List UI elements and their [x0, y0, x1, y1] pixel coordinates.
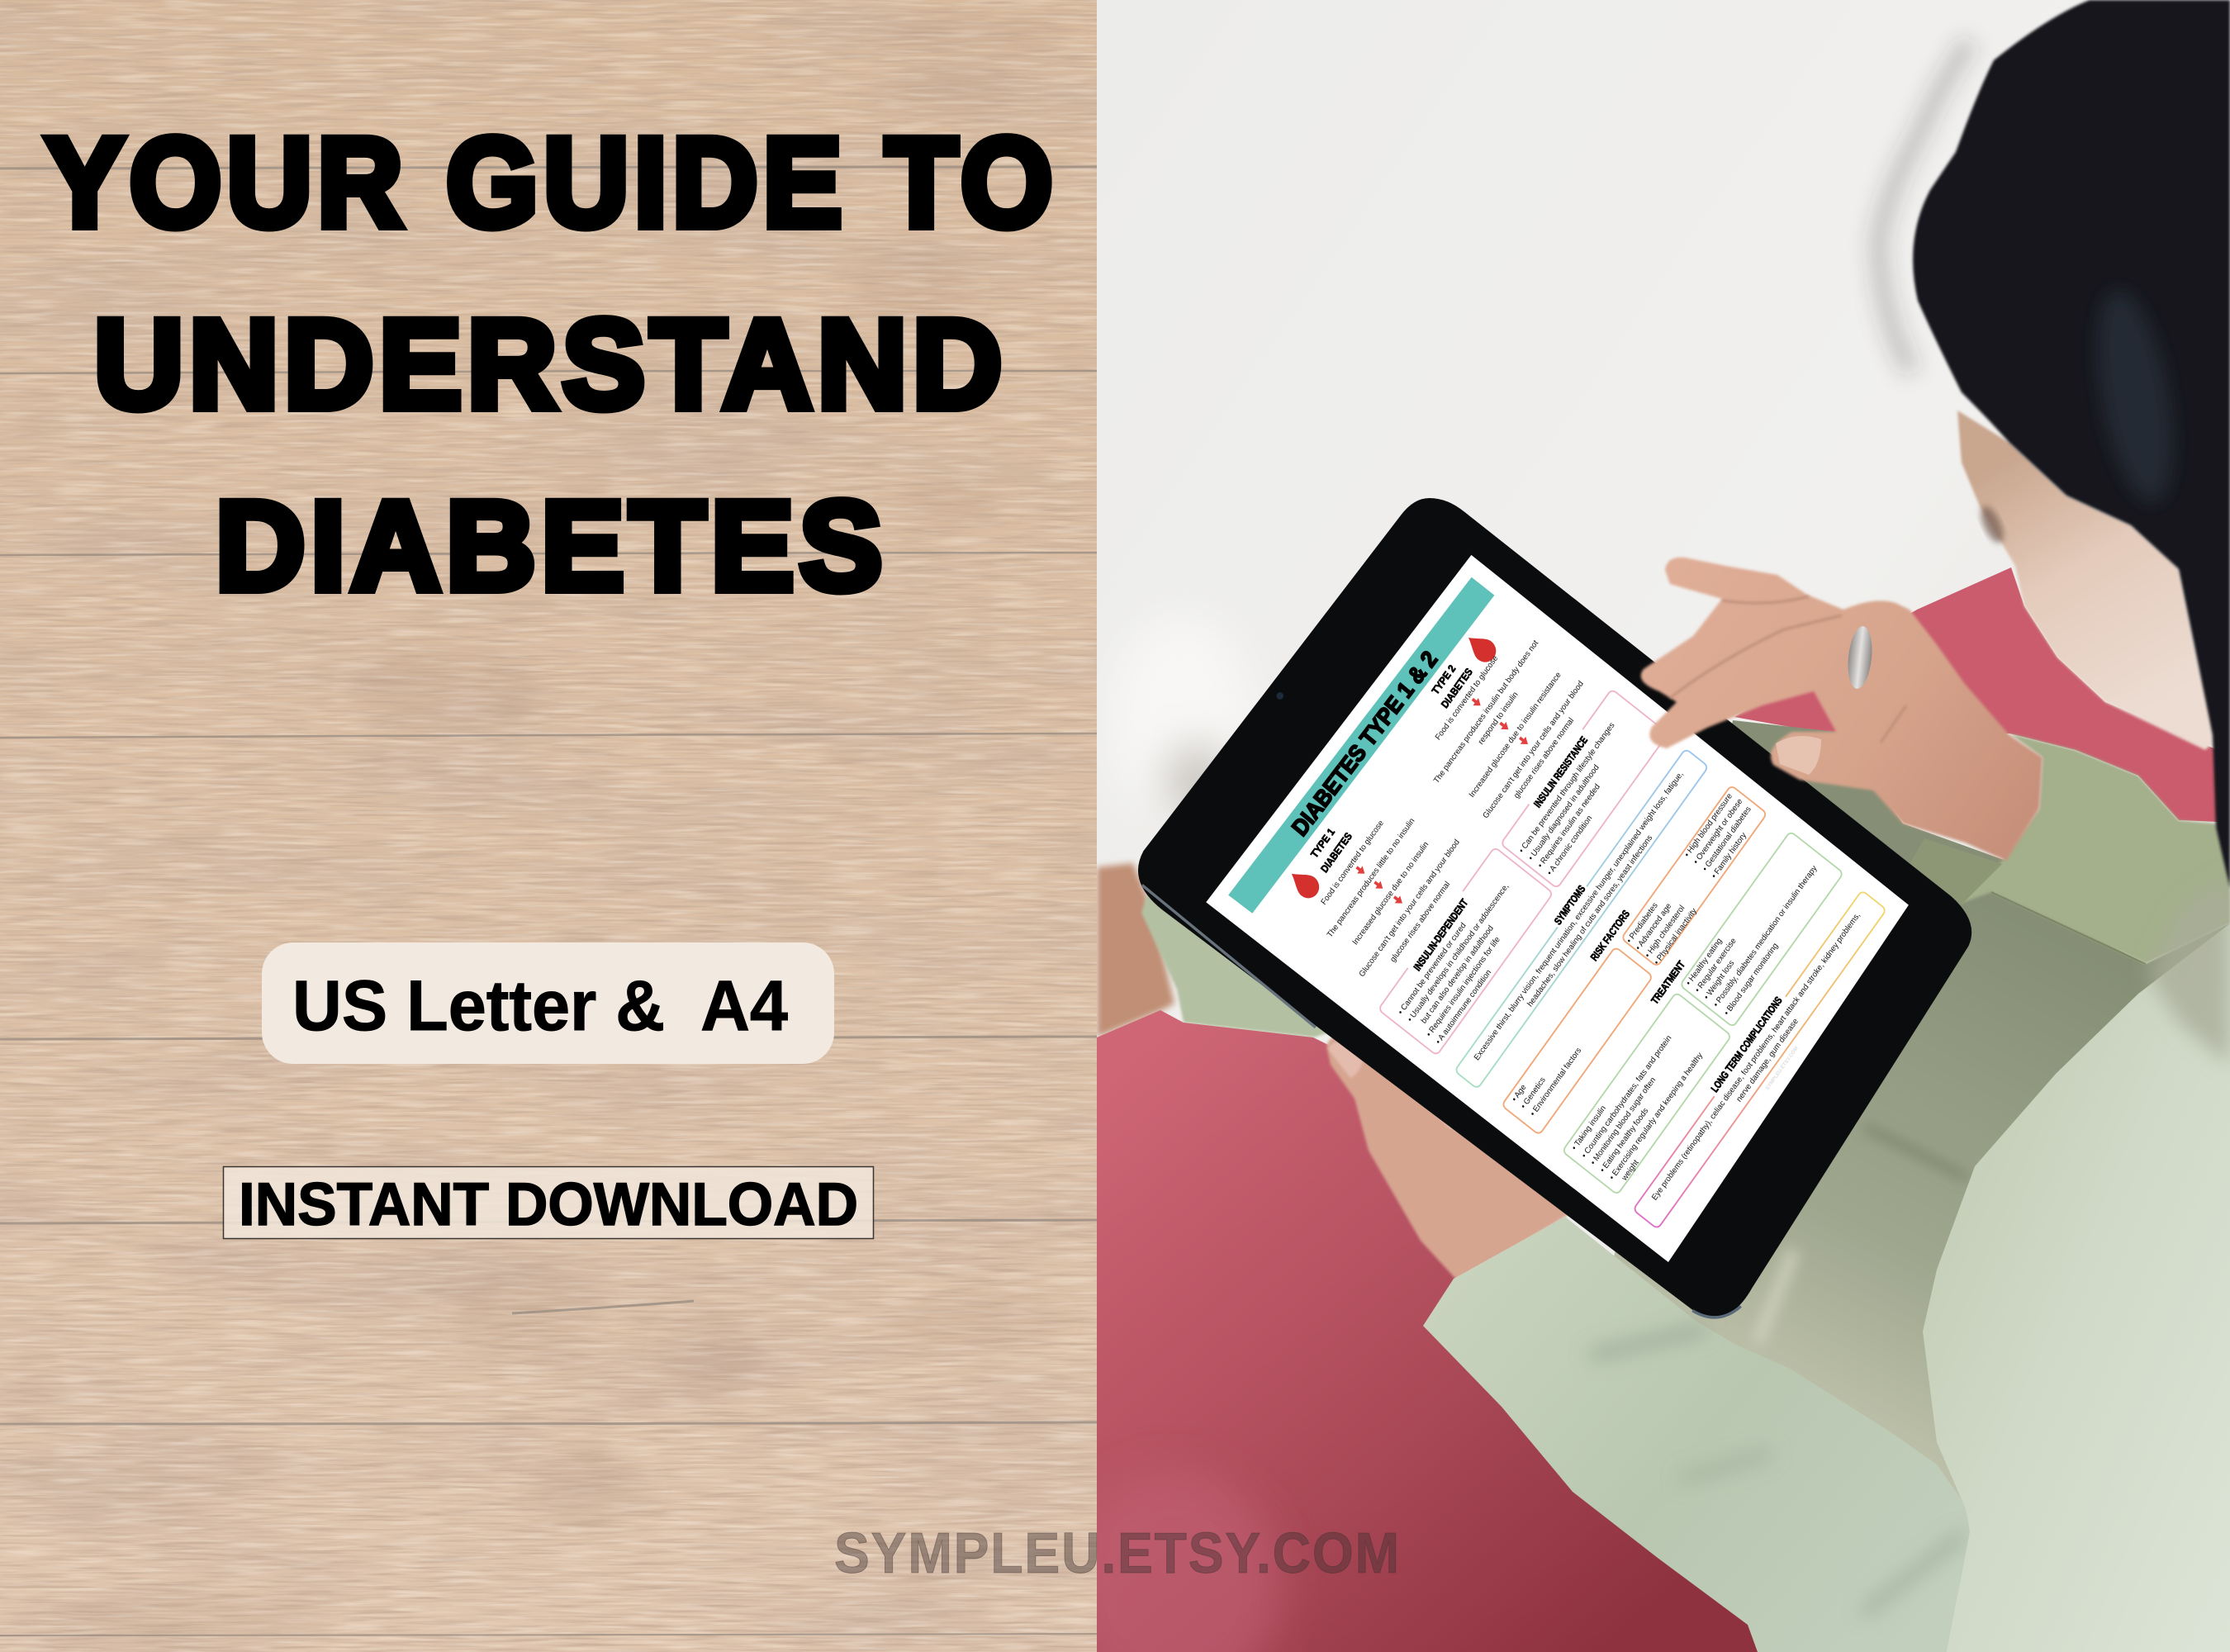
type 2 column: glucose rises above normal [1512, 716, 1576, 800]
symptoms box: SYMPTOMS [1552, 883, 1587, 927]
title: DIABETES [216, 476, 888, 616]
insulin resistance box: • A chronic condition [1545, 814, 1594, 877]
risk factors boxes: • Overweight or obese [1691, 797, 1744, 866]
treatment boxes: • Possibly, diabetes medication or insulin therapy [1712, 864, 1819, 1009]
treatment boxes: TREATMENT [1649, 958, 1687, 1006]
photo: woman reading diabetes guide on tablet [1065, 0, 2230, 1652]
treatment boxes: • Taking insulin [1570, 1104, 1608, 1152]
risk factors boxes: • Genetics [1519, 1075, 1548, 1111]
risk factors boxes: • Age [1510, 1083, 1528, 1104]
risk factors boxes: • Environmental factors [1529, 1046, 1583, 1118]
symptoms box: headaches, slow healing of cuts and sores, yeast infections [1525, 833, 1654, 1009]
insulin-dependent box: INSULIN-DEPENDENT [1412, 896, 1470, 973]
risk factors boxes: • Gestational diabetes [1701, 805, 1753, 873]
teal title band [1228, 569, 1494, 921]
wall [1097, 0, 2230, 1256]
insulin resistance box [1498, 687, 1668, 889]
right hand touching tablet [1641, 558, 2043, 861]
insulin resistance box: • Usually diagnosed in adulthood [1527, 763, 1601, 862]
title [45, 112, 1058, 616]
title: UNDERSTAND [94, 294, 1008, 434]
risk factors boxes: • Advanced age [1634, 902, 1673, 952]
insulin-dependent box: • Usually develops in childhood or adolescence, [1406, 882, 1511, 1024]
hair [1879, 0, 2230, 888]
symptoms box: Excessive thirst, blurry vision, frequent urination, excessive hunger, unexplained weight loss, fatigue, [1473, 770, 1686, 1062]
face [1957, 411, 2222, 750]
insulin-dependent box: but can also develop in adulthood [1420, 923, 1496, 1026]
treatment boxes: weight [1620, 1158, 1641, 1183]
symptoms box [1448, 743, 1709, 1089]
type 2 column: Glucose can't get into your cells and your blood [1482, 679, 1586, 820]
insulin-dependent box: • A autoimmune condition [1434, 968, 1493, 1047]
sleeve under tablet [1141, 894, 1327, 1038]
watermark: shop url: SYMPLEU.ETSY.COM [834, 1521, 1401, 1585]
treatment boxes: • Exercising regularly and keeping a healthy [1608, 1051, 1705, 1182]
panel: wood background [0, 0, 1097, 1652]
forearm skin behind tablet [1097, 863, 1174, 1037]
insulin-dependent box [1376, 845, 1553, 1056]
insulin-dependent box: • Cannot be prevented or cured [1397, 921, 1468, 1017]
long term complications box: LONG TERM COMPLICATIONS [1709, 995, 1785, 1094]
arrows type 2 [1468, 695, 1531, 748]
instant download label: INSTANT DOWNLOAD [239, 1171, 858, 1238]
left hand holding tablet [1326, 1034, 1569, 1282]
blouse [1923, 876, 2230, 1652]
type 2 column: TYPE 2 [1430, 662, 1458, 697]
lower sofa [1097, 1010, 1817, 1652]
risk factors boxes: • High cholesterol [1644, 904, 1687, 960]
treatment boxes: • Blood sugar monitoring [1722, 942, 1780, 1018]
insulin resistance box: • Can be prevented through lifestyle changes [1517, 721, 1616, 855]
type 1 column: glucose rises above normal [1388, 880, 1452, 964]
type 2 column [1389, 605, 1599, 831]
treatment boxes: • Monitoring blood sugar often [1589, 1075, 1658, 1167]
risk factors boxes: • Physical inactivity [1653, 906, 1699, 966]
blurred pillow and foot [1130, 638, 1229, 814]
type 1 column: DIABETES [1318, 830, 1355, 875]
document on tablet screen [1206, 555, 1909, 1262]
teal title band: DIABETES TYPE 1 & 2 [1287, 646, 1442, 841]
type 1 column: Food is converted to glucose [1320, 819, 1386, 907]
type 1 column: Increased glucose due to no insulin [1351, 840, 1431, 947]
treatment boxes: • Eating healthy foods [1598, 1106, 1650, 1175]
insulin resistance box: • Requires insulin as needed [1536, 782, 1602, 870]
format badge [262, 942, 834, 1064]
icon: blood drop type 2 [1462, 629, 1501, 667]
long term complications box: nerve damage, gum disease [1734, 1017, 1801, 1104]
upper sofa [1734, 567, 2218, 822]
risk factors boxes: RISK FACTORS [1588, 908, 1632, 963]
risk factors boxes: • Prediabetes [1625, 901, 1660, 945]
treatment boxes: • Healthy eating [1684, 937, 1724, 987]
front sleeve [1423, 1217, 1970, 1652]
trouser folds [1759, 1127, 1966, 1338]
treatment boxes: • Weight loss [1702, 959, 1736, 1002]
type 2 column: Increased glucose due to insulin resistance [1468, 671, 1563, 800]
type 1 column: The pancreas produces little to no insulin [1326, 817, 1416, 939]
type 1 column: Glucose can't get into your cells and your blood [1358, 838, 1462, 979]
title: YOUR GUIDE TO [45, 112, 1058, 253]
long term complications box: Eye problems (retinopathy), celiac disease, foot problems, heart attack and stroke, kidney problems, [1650, 911, 1862, 1203]
insulin-dependent box: • Requires insulin injections for life [1425, 935, 1502, 1039]
sofa lower-left sheen [1097, 1477, 1283, 1652]
type 1 column [1269, 769, 1475, 990]
right sleeve [1959, 733, 2230, 965]
arrows type 1 [1354, 863, 1405, 908]
long term complications box [1625, 885, 1895, 1236]
risk factors boxes [1488, 775, 1769, 1135]
trousers [1611, 720, 2230, 1611]
type 2 column: The pancreas produces insulin but body does not [1432, 638, 1540, 786]
insulin resistance box: INSULIN RESISTANCE [1532, 734, 1590, 809]
type 2 column: Food is converted to glucose [1434, 654, 1500, 742]
format badge: US Letter & A4 [292, 966, 788, 1046]
ring [1845, 625, 1875, 690]
icon: blood drop type 1 [1285, 865, 1323, 903]
type 2 column: respond to insulin [1477, 691, 1521, 747]
treatment boxes: • Regular exercise [1693, 937, 1739, 995]
treatment boxes: • Counting carbohydrates, fats and protein [1580, 1033, 1673, 1160]
risk factors boxes: • Family history [1710, 831, 1748, 881]
risk factors boxes: • High blood pressure [1683, 791, 1734, 859]
tablet [1138, 498, 1971, 1317]
type 1 column: TYPE 1 [1308, 826, 1337, 860]
long term complications box: SYMPLEU.ETSY.COM [1764, 1046, 1800, 1091]
treatment boxes [1548, 820, 1847, 1195]
type 2 column: DIABETES [1439, 666, 1475, 710]
